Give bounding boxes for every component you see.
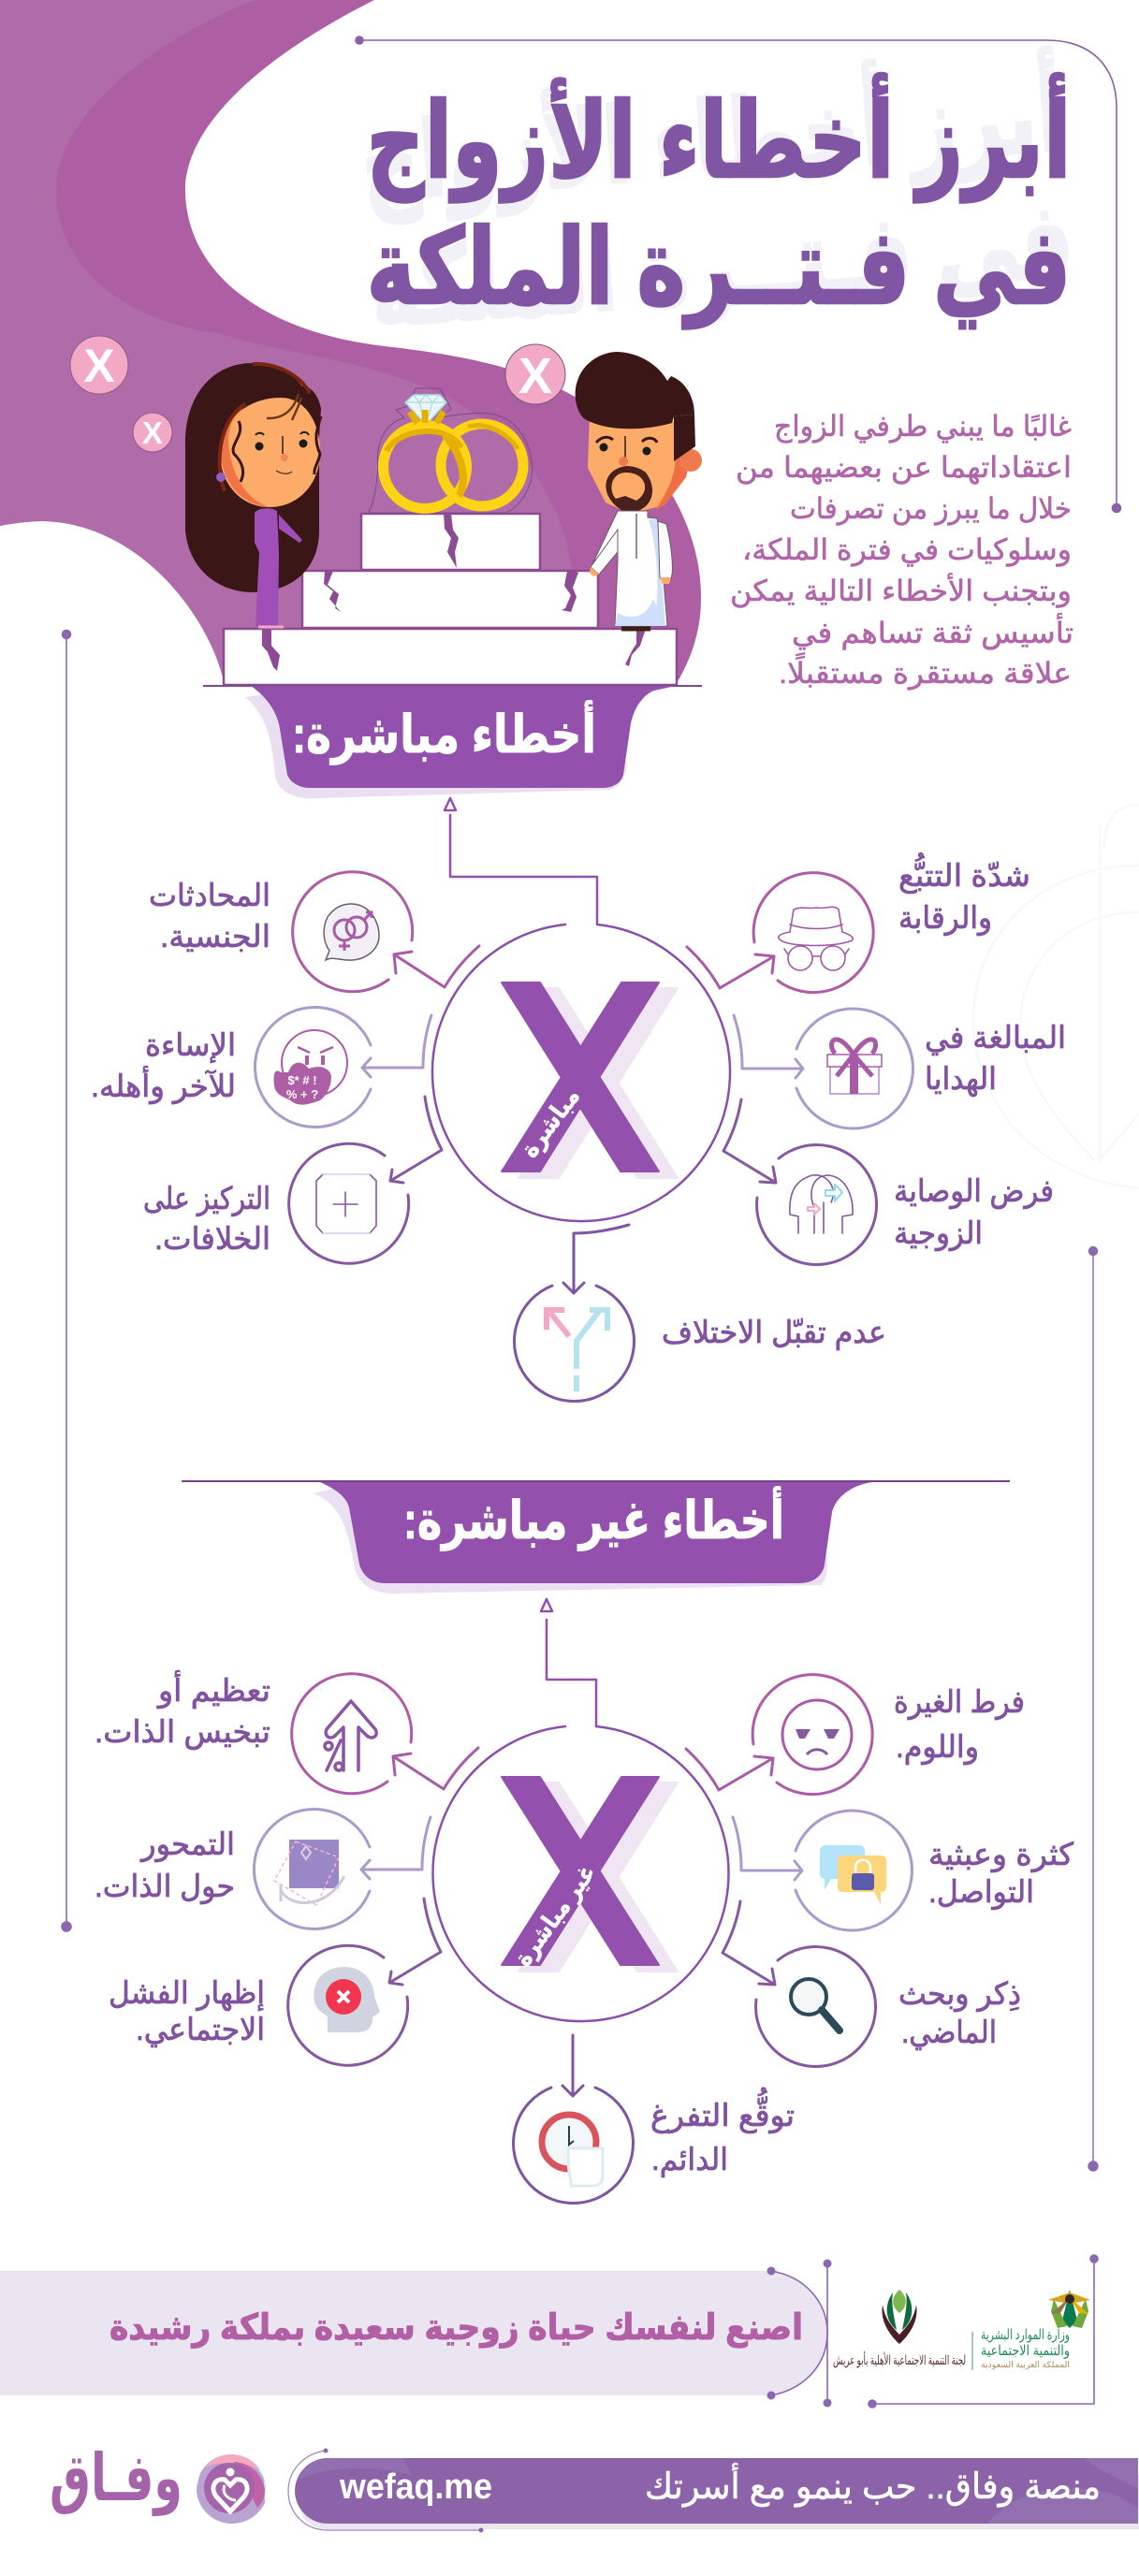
icon: angry face with swear cloud: $* # ! bbox=[287, 1073, 317, 1087]
background blob: header purple shape bbox=[0, 0, 701, 685]
icon: gift box bbox=[827, 1040, 882, 1094]
diagram 1: labels: شدّة التتبُّع bbox=[898, 852, 1030, 894]
title shadow bbox=[356, 46, 1077, 353]
watermark: faint heart rings bbox=[973, 805, 1139, 1188]
diagram 2: labels: الدائم. bbox=[651, 2142, 728, 2177]
heading banner: indirect mistakes: أخطاء غير مباشرة: bbox=[403, 1486, 784, 1551]
heading banner: indirect mistakes bbox=[182, 1481, 1010, 1594]
logo: ministry of human resources: المملكة العربية السعودية bbox=[981, 2360, 1070, 2369]
diagram 1: labels: فرض الوصاية bbox=[894, 1173, 1054, 1210]
icon: angry face with swear cloud bbox=[274, 1030, 347, 1105]
bottom bar: slogan and website bbox=[288, 2448, 1139, 2532]
heading banner: direct mistakes bbox=[245, 686, 676, 798]
intro paragraph bbox=[730, 410, 1073, 691]
bottom bar: slogan and website: wefaq.me bbox=[339, 2467, 492, 2507]
diagram 2: labels: حول الذات. bbox=[95, 1869, 235, 1904]
icon: chat bubbles with lock bbox=[820, 1845, 886, 1904]
diagram 1: labels: المبالغة في bbox=[925, 1020, 1066, 1055]
diagram 1: labels: الإساءة bbox=[145, 1027, 236, 1063]
bottom bar: slogan and website: منصة وفاق.. حب ينمو مع أسرتك bbox=[645, 2463, 1101, 2508]
diagram 2: arrows bbox=[361, 1748, 802, 1985]
intro paragraph: وبتجنب الأخطاء التالية يمكن bbox=[730, 573, 1072, 608]
icon: pink x bubbles bbox=[70, 336, 565, 452]
icon: man bbox=[576, 352, 702, 629]
diagram 2: labels bbox=[95, 1670, 1073, 2177]
diagram 2: labels: التواصل. bbox=[928, 1874, 1034, 1910]
diagram 1: big cross mark in circle bbox=[432, 924, 730, 1221]
diagram 2: labels: الاجتماعي. bbox=[136, 2012, 265, 2047]
diagram 1: icon rings bbox=[255, 872, 913, 1402]
icon: percent arrow bbox=[325, 1701, 376, 1770]
partner logos bracket bbox=[869, 2255, 1098, 2408]
intro paragraph: خلال ما يبرز من تصرفات bbox=[790, 492, 1072, 526]
diagram 1: labels bbox=[91, 852, 1066, 1350]
diagram 1: arrows bbox=[362, 946, 803, 1293]
diagram 2: labels: واللوم. bbox=[896, 1729, 979, 1765]
illustration: couple and cracked steps bbox=[70, 336, 702, 686]
icon: rotating square bbox=[274, 1840, 344, 1905]
frame line: top right corner bbox=[356, 36, 1121, 513]
diagram 2: labels: فرط الغيرة bbox=[894, 1684, 1025, 1720]
icon: pink x bubbles: X bbox=[518, 348, 552, 404]
connector arrow to heading 2 bbox=[541, 1599, 596, 1726]
icon: woman bbox=[185, 363, 321, 627]
connector arrow to heading 1 bbox=[445, 798, 597, 923]
steps bbox=[203, 514, 702, 686]
diagram 1: labels: الجنسية. bbox=[160, 919, 270, 953]
cracks bbox=[262, 514, 646, 671]
intro paragraph: وسلوكيات في فترة الملكة، bbox=[742, 533, 1072, 567]
diagram 2: icon rings bbox=[254, 1674, 912, 2204]
icon: gender symbols speech bubble bbox=[324, 904, 379, 960]
call to action band bbox=[0, 2259, 831, 2407]
diagram 1: labels: الخلافات. bbox=[154, 1221, 270, 1256]
logo: wefaq: وفـاق bbox=[50, 2441, 183, 2516]
diagram 1: labels: للآخر وأهله. bbox=[91, 1066, 236, 1104]
diagram 2: labels: التمحور bbox=[139, 1826, 235, 1862]
intro paragraph: تأسيس ثقة تساهم في bbox=[792, 613, 1073, 650]
icon: angry face with swear cloud: % + ? bbox=[286, 1087, 318, 1101]
heading banner: direct mistakes: أخطاء مباشرة: bbox=[292, 700, 596, 765]
diagram 2: labels: تعظيم أو bbox=[156, 1670, 270, 1709]
icon: pink x bubbles: X bbox=[83, 340, 115, 392]
diagram 2: labels: إظهار الفشل bbox=[109, 1975, 265, 2012]
logo: social development committee bbox=[833, 2290, 966, 2368]
diagram 1: big cross mark in circle: مباشرة bbox=[515, 1083, 586, 1163]
icon: annoyed face bbox=[782, 1700, 852, 1769]
diagram 2: labels: كثرة وعبثية bbox=[928, 1837, 1073, 1872]
diagram 1: labels: الهدايا bbox=[925, 1061, 997, 1097]
diagram 2: labels: الماضي. bbox=[901, 2015, 997, 2050]
diagram 1: labels: الزوجية bbox=[894, 1215, 983, 1251]
logo: social development committee: لجنة التنمية الاجتماعية الأهلية بأبو عريش bbox=[833, 2350, 966, 2368]
icon: spy hat and glasses bbox=[779, 907, 853, 970]
logo: ministry of human resources bbox=[972, 2290, 1090, 2370]
diagram 2: labels: ذِكر وبحث bbox=[898, 1976, 1021, 2012]
intro paragraph: اعتقاداتهما عن بعضيهما من bbox=[736, 451, 1072, 485]
logo: ministry of human resources: والتنمية الاجتماعية bbox=[981, 2343, 1070, 2359]
icon: pink x bubbles: X bbox=[142, 415, 163, 450]
icon: diverging arrows bbox=[547, 1310, 607, 1391]
diagram 2: bottom arrow bbox=[562, 2035, 583, 2096]
vertical guide line right bbox=[1088, 1246, 1098, 2171]
diagram 2: big cross mark in circle: غير مباشرة bbox=[508, 1859, 602, 1972]
icon: magnifier bbox=[791, 1979, 840, 2030]
logo: ministry of human resources: وزارة الموارد البشرية bbox=[981, 2327, 1070, 2343]
icon: clock and cup bbox=[542, 2115, 603, 2186]
intro paragraph: علاقة مستقرة مستقبلًا. bbox=[779, 652, 1072, 691]
intro paragraph: غالبًا ما يبني طرفي الزواج bbox=[774, 410, 1072, 444]
title bbox=[356, 46, 1077, 353]
diagram 2: labels: توقُّع التفرغ bbox=[650, 2088, 795, 2133]
diagram 2: labels: تبخيس الذات. bbox=[95, 1714, 270, 1750]
call to action band: اصنع لنفسك حياة زوجية سعيدة بملكة رشيدة bbox=[110, 2308, 803, 2349]
icon: head with x mark bbox=[314, 1967, 380, 2032]
diagram 1: labels: المحادثات bbox=[149, 878, 270, 912]
diagram 1: labels: التركيز على bbox=[143, 1181, 270, 1216]
vertical guide line left bbox=[62, 631, 71, 1931]
icon: focus frame bbox=[316, 1174, 376, 1233]
icon: wedding rings with diamond bbox=[369, 388, 533, 513]
diagram 1: labels: والرقابة bbox=[898, 900, 992, 936]
icon: two heads bbox=[790, 1175, 853, 1233]
diagram 1: labels: عدم تقبّل الاختلاف bbox=[662, 1315, 886, 1350]
diagram 2: big cross mark in circle bbox=[432, 1726, 728, 2021]
